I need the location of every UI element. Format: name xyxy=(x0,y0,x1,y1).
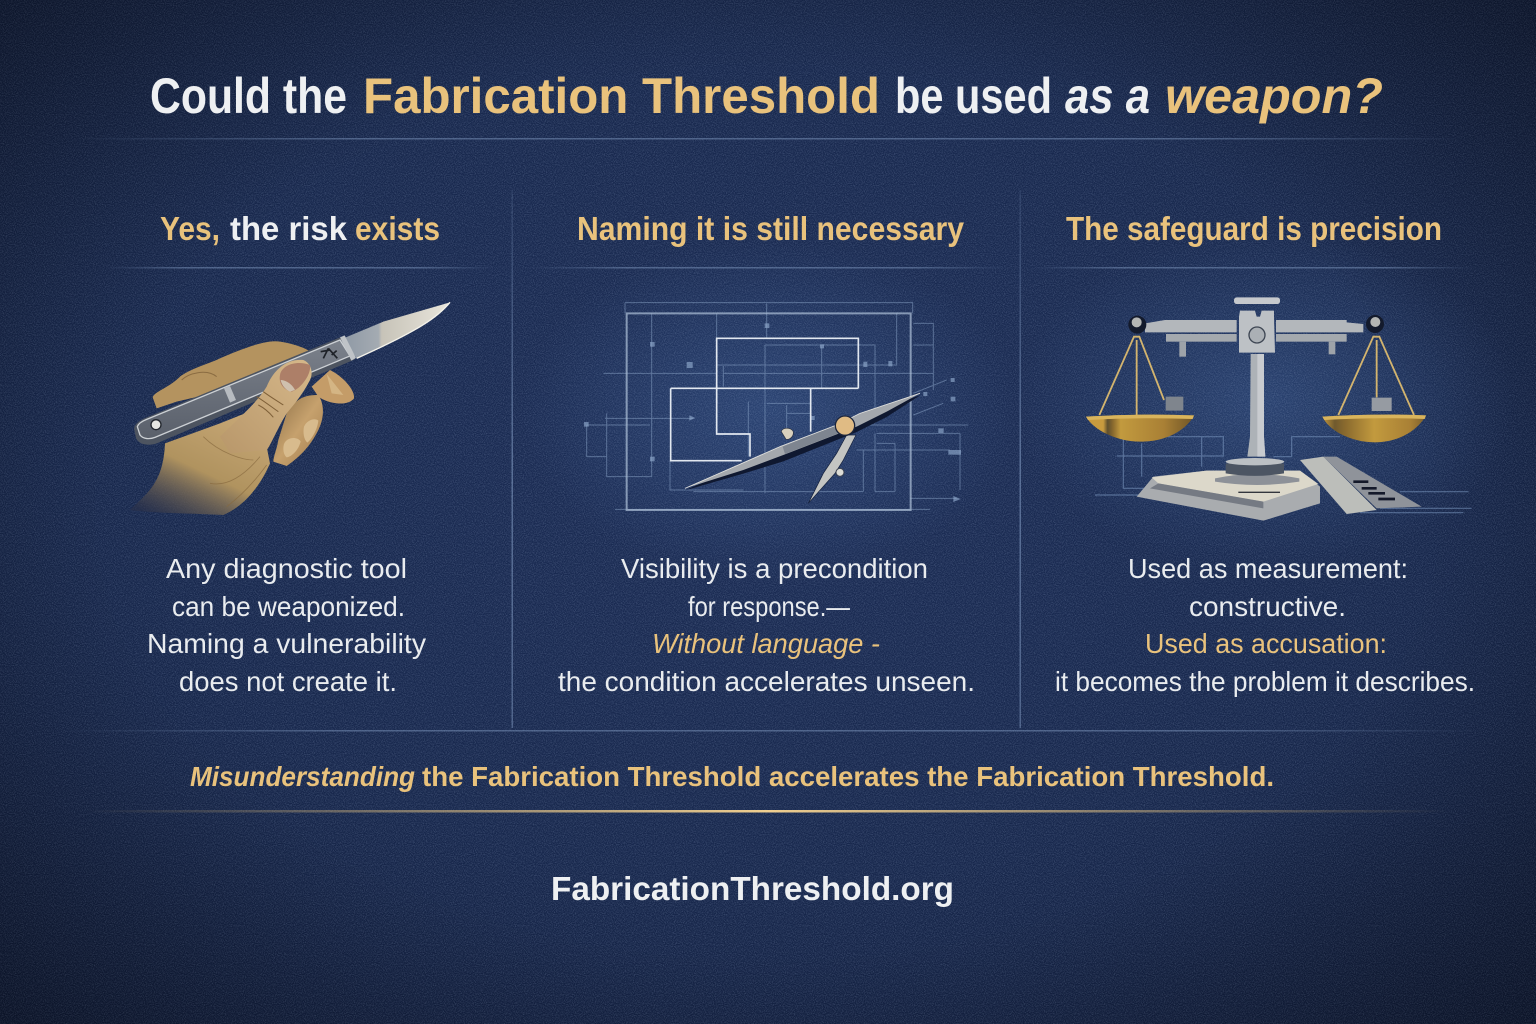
body text: Any diagnostic tool xyxy=(166,553,407,584)
body text: it becomes the problem it describes. xyxy=(1055,666,1475,697)
bright plan outline xyxy=(671,338,858,461)
website: FabricationThreshold.org xyxy=(551,870,954,907)
body text xyxy=(1055,553,1475,697)
beam xyxy=(1145,320,1237,332)
heading: yes, the risk exists: exists xyxy=(355,210,440,247)
body text: Naming a vulnerability xyxy=(147,628,426,659)
right weight xyxy=(1372,398,1392,411)
title xyxy=(150,68,1383,124)
panel: the risk exists xyxy=(105,210,497,697)
scalpel handle xyxy=(134,337,355,445)
panel: naming it is still necessary xyxy=(530,210,1008,697)
right pan xyxy=(1322,415,1426,442)
left pan strings xyxy=(1099,337,1164,415)
panel: the safeguard is precision xyxy=(1030,210,1475,697)
column xyxy=(1247,354,1265,457)
back finger xyxy=(153,341,313,408)
body text: can be weaponized. xyxy=(172,591,405,622)
icon: balance scale xyxy=(1086,297,1472,521)
body text: the condition accelerates unseen. xyxy=(558,666,975,697)
compass main arm xyxy=(685,395,920,490)
title: be used xyxy=(895,68,1052,124)
base slab xyxy=(1137,471,1320,521)
body text: for response.— xyxy=(688,591,850,622)
title: Could the xyxy=(150,68,347,124)
blueprint fine lines xyxy=(587,303,968,509)
right pan strings xyxy=(1338,337,1414,415)
takeaway line: Misunderstanding xyxy=(190,761,415,792)
body text: Used as accusation: xyxy=(1145,628,1387,659)
beam end balls xyxy=(1128,316,1146,334)
body text: Visibility is a precondition xyxy=(621,553,928,584)
faint blueprint lines xyxy=(1095,437,1472,513)
ruler 1 xyxy=(1300,457,1377,514)
left weight xyxy=(1166,397,1183,411)
heading: safeguard: The safeguard is precision xyxy=(1066,210,1442,247)
compass hinge xyxy=(835,416,855,435)
title: Fabrication Threshold xyxy=(363,68,880,124)
heading: yes, the risk exists xyxy=(160,210,440,247)
left pan xyxy=(1086,415,1194,442)
body text: Used as measurement: xyxy=(1128,553,1408,584)
title: weapon? xyxy=(1165,68,1383,124)
body text: Without language - xyxy=(652,628,880,659)
heading: yes, the risk exists: Yes, xyxy=(160,210,220,247)
central block xyxy=(1239,311,1275,353)
compass needle knob xyxy=(781,428,793,439)
body text: constructive. xyxy=(1189,591,1346,622)
collar xyxy=(1215,474,1299,485)
palm xyxy=(130,403,270,515)
heading: yes, the risk exists: the risk xyxy=(230,210,348,247)
body text xyxy=(558,553,975,697)
icon: blueprint with compass xyxy=(584,303,968,510)
thumb xyxy=(220,360,312,453)
compass lower leg xyxy=(808,435,856,503)
body text xyxy=(147,553,426,697)
takeaway line: the Fabrication Threshold accelerates the Fabrication Threshold. xyxy=(422,761,1274,792)
outer frame xyxy=(627,313,911,510)
scalpel blade xyxy=(343,302,450,358)
ruler 2 xyxy=(1323,457,1422,508)
title: as a xyxy=(1065,68,1150,124)
heading: naming it: Naming it is still necessary xyxy=(577,210,965,247)
body text: does not create it. xyxy=(179,666,397,697)
icon: hand holding scalpel xyxy=(130,302,450,515)
curled fingers xyxy=(312,370,354,404)
